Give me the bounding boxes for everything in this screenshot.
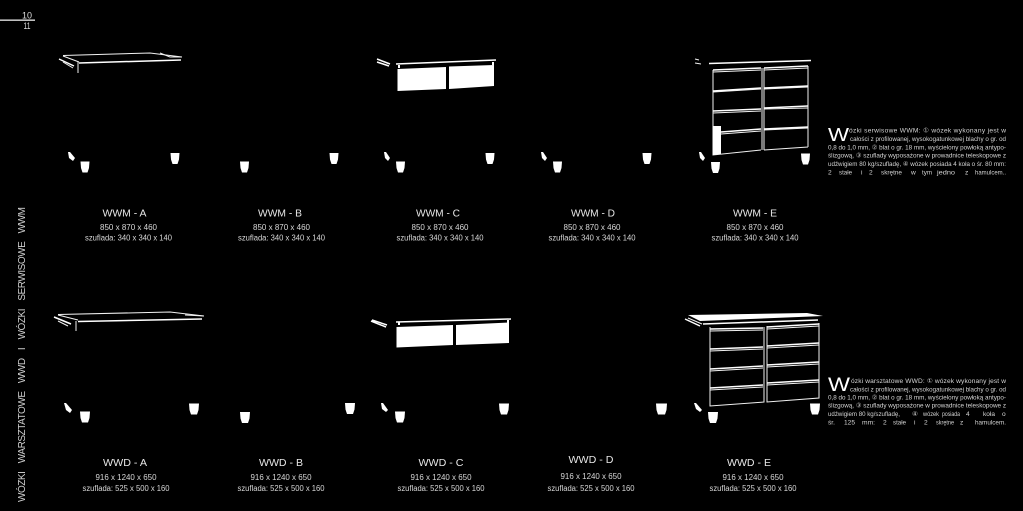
text block: WWD description: hamulcem. (975, 420, 1006, 426)
text block: WWM description: 0,8 do 1,0 mm, ② blat o gr. 18 mm, wyścielony powłoką antypo- (828, 144, 1006, 152)
text block: WWD description: 0,8 do 1,0 mm, ② blat o gr. 18 mm, wyścielony powłoką antypo- (828, 394, 1006, 402)
page numbers (0, 10, 35, 32)
text block: WWD description: mm: (862, 420, 875, 426)
label: WWM-A: WWM - A (102, 208, 146, 220)
text block: WWD description: 125 (844, 420, 855, 426)
label: WWM-D: szuflada: 340 x 340 x 140 (548, 234, 636, 242)
label: WWM-A: 850 x 870 x 460 (100, 223, 158, 232)
text block: WWD description: ózki warsztatowe WWD: ① wózek wykonany jest w (851, 378, 1006, 385)
label: WWD-E (710, 457, 797, 493)
cart: WWM-A (59, 53, 182, 172)
label: WWD-C: WWD - C (418, 457, 464, 469)
label: WWD-A: 916 x 1240 x 650 (96, 473, 157, 482)
text block: WWD description: z (960, 420, 963, 426)
label: WWM-A (85, 208, 173, 242)
text block: WWM description: z (965, 170, 968, 176)
text block: WWD description: posiada (942, 411, 960, 418)
label: WWD-D: 916 x 1240 x 650 (560, 472, 622, 481)
label: WWD-E: szuflada: 525 x 500 x 160 (710, 484, 797, 493)
page numbers: 10 (22, 10, 32, 22)
label: WWD-C: szuflada: 525 x 500 x 160 (398, 484, 485, 493)
label: WWD-A: WWD - A (103, 457, 147, 469)
label: WWM-B (238, 208, 326, 242)
text block: WWD description: 4 (966, 411, 970, 418)
label: WWD-B: WWD - B (259, 457, 303, 469)
cart: WWD-C (371, 319, 511, 422)
text block: WWM description: jedno (936, 170, 955, 176)
text block: WWM description: ślizgową, ③ szuflady wyposażone w prowadnice teleskopowe z (828, 152, 1006, 160)
label: WWD-C (398, 457, 485, 493)
label: WWM-E (712, 208, 799, 242)
label: WWM-E: szuflada: 340 x 340 x 140 (712, 234, 799, 242)
label: WWM-B: szuflada: 340 x 340 x 140 (238, 234, 326, 242)
cart: WWM-B (240, 153, 338, 172)
cart: WWM-C (377, 59, 496, 172)
text block: WWD description: całości z profilowanej, wysokogatunkowej blachy o gr. od (850, 386, 1006, 394)
text block: WWM description: hamulcem.. (975, 170, 1006, 176)
label: WWD-B (238, 457, 325, 493)
text block: WWM description: i (861, 170, 863, 176)
text block: WWM description: ózki serwisowe WWM: ① wózek wykonany jest w (849, 128, 1006, 134)
text block: WWD description: skrętne (936, 420, 954, 426)
text block: WWD description (828, 375, 1006, 426)
label: WWM-B: 850 x 870 x 460 (253, 223, 311, 232)
label: WWM-E: WWM - E (733, 208, 777, 220)
cart: WWD-A (54, 312, 204, 422)
text block: WWD description: koła (983, 411, 995, 418)
label: WWD-A (82, 457, 170, 493)
cart: WWM-E (695, 59, 811, 173)
text block: WWD description: wózek (922, 411, 940, 418)
text block: WWM description: stałe (839, 170, 852, 176)
vertical section title: WÓZKI WARSZTATOWE WWD I WÓZKI SERWISOWE WWM (15, 207, 28, 502)
text block: WWD description: 2 (883, 420, 887, 426)
text block: WWM description: tym (922, 170, 932, 176)
text block: WWM description (828, 125, 1006, 176)
label: WWD-C: 916 x 1240 x 650 (410, 473, 472, 482)
cart: WWD-E (685, 313, 823, 423)
text block: WWD description: i (914, 420, 916, 426)
text block: WWD description: o (1002, 411, 1006, 418)
label: WWM-D: WWM - D (571, 208, 615, 220)
label: WWM-C: szuflada: 340 x 340 x 140 (396, 234, 484, 242)
text block: WWM description: całości z profilowanej, wysokogatunkowej blachy o gr. od (850, 136, 1006, 143)
label: WWM-C: 850 x 870 x 460 (412, 223, 469, 232)
text block: WWM description: skrętne (881, 170, 902, 176)
label: WWD-B: szuflada: 525 x 500 x 160 (238, 484, 325, 493)
text block: WWD description: udźwigiem 80 kg/szufladę, (828, 411, 900, 418)
label: WWD-D: szuflada: 525 x 500 x 160 (548, 484, 635, 493)
text block: WWD description: W (828, 375, 850, 396)
cart: WWM-D (541, 152, 652, 172)
cart: WWD-D (656, 404, 667, 414)
text block: WWD description: stałe (893, 420, 906, 426)
text block: WWM description: udźwigiem 80 kg/szufladę, ④ wózek posiada 4 koła o śr. 80 mm: (828, 161, 1006, 168)
page numbers: 11 (24, 21, 30, 32)
label: WWM-E: 850 x 870 x 460 (726, 223, 784, 232)
label: WWM-D: 850 x 870 x 460 (564, 223, 621, 232)
label: WWD-B: 916 x 1240 x 650 (250, 473, 312, 482)
label: WWD-D (548, 454, 635, 493)
text block: WWM description: W (828, 125, 849, 145)
text block: WWD description: śr. (828, 420, 835, 426)
text block: WWD description: ④ (912, 411, 918, 418)
text block: WWD description: 2 (924, 420, 928, 426)
label: WWD-D: WWD - D (568, 454, 614, 466)
text block: WWD description: ślizgową, ③ szuflady wyposażone w prowadnice teleskopowe z (828, 402, 1006, 410)
label: WWM-B: WWM - B (258, 208, 302, 220)
text block: WWM description: 2 (869, 170, 873, 176)
text block: WWM description: 2 (828, 170, 832, 176)
label: WWD-E: 916 x 1240 x 650 (722, 473, 784, 482)
cart: WWD-B (240, 403, 355, 423)
label: WWM-D (548, 208, 636, 242)
label: WWD-E: WWD - E (727, 457, 771, 469)
label: WWD-A: szuflada: 525 x 500 x 160 (82, 484, 170, 493)
label: WWM-C (396, 208, 484, 242)
label: WWM-A: szuflada: 340 x 340 x 140 (85, 234, 173, 242)
label: WWM-C: WWM - C (416, 208, 460, 220)
text block: WWM description: w (910, 170, 916, 176)
